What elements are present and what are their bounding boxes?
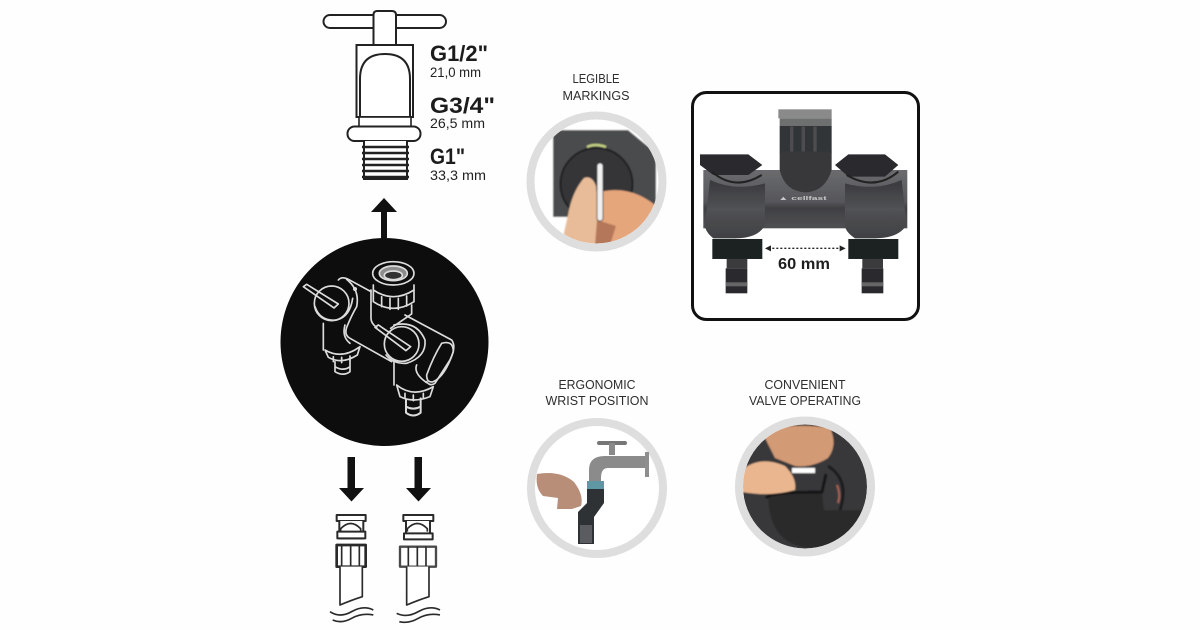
hand xyxy=(537,473,582,509)
size G1/2: G1/2" xyxy=(430,41,488,66)
arrows: down to hoses xyxy=(339,457,431,502)
heading: legible markings: MARKINGS xyxy=(562,88,630,103)
dimension label: 60 mm xyxy=(778,256,830,273)
heading: legible markings xyxy=(562,71,630,103)
infographic canvas xyxy=(280,10,920,624)
thread sizes xyxy=(430,41,495,183)
hose fittings xyxy=(330,515,440,622)
tap and connector xyxy=(578,441,649,544)
black circle: connector line drawing xyxy=(280,238,488,446)
arrow: up to tap xyxy=(371,198,397,238)
photo circle: ergonomic wrist position xyxy=(531,422,663,554)
size G1: G1" xyxy=(430,144,465,169)
heading: legible markings: LEGIBLE xyxy=(572,71,620,86)
right valve xyxy=(835,154,907,293)
size 33,3 mm: 33,3 mm xyxy=(430,168,486,183)
fitting right xyxy=(397,515,440,622)
heading: convenient valve operating: VALVE OPERATING xyxy=(749,393,861,408)
dimension arrow xyxy=(765,245,846,251)
size 21,0 mm: 21,0 mm xyxy=(430,65,481,80)
top inlet xyxy=(778,109,832,192)
heading: convenient valve operating: CONVENIENT xyxy=(764,377,846,392)
photo circle: legible markings xyxy=(526,112,666,252)
body bar xyxy=(703,170,907,228)
fitting left xyxy=(330,515,373,622)
icon: tap outline xyxy=(324,11,446,179)
photo circle: convenient valve operating xyxy=(735,420,875,555)
dot marks xyxy=(353,287,357,291)
size G3/4: G3/4" xyxy=(430,93,495,118)
panel: 60 mm product photo xyxy=(692,92,918,320)
heading: convenient valve operating xyxy=(749,377,861,408)
heading: ergonomic wrist position xyxy=(546,377,648,408)
heading: ergonomic wrist position: ERGONOMIC xyxy=(558,377,636,392)
brand mark: ▲ cellfast xyxy=(778,196,827,202)
left valve xyxy=(700,154,765,293)
size 26,5 mm: 26,5 mm xyxy=(430,116,485,131)
heading: ergonomic wrist position: WRIST POSITION xyxy=(546,393,648,408)
